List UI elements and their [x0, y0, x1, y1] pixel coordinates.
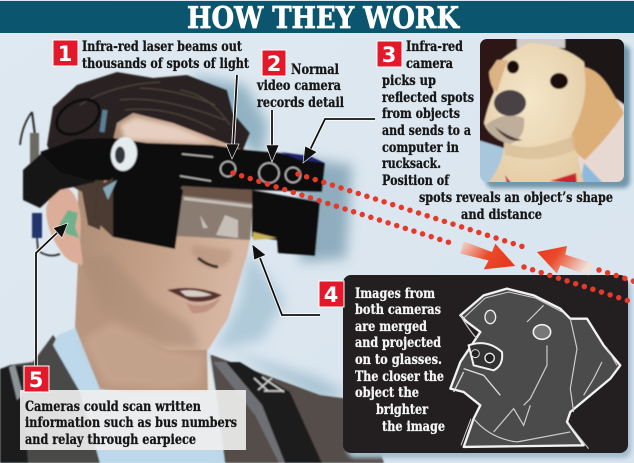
badge 4: [319, 281, 344, 307]
dog outline image: [450, 289, 620, 449]
dog eye: [533, 325, 551, 339]
badge 4: 4: [324, 283, 338, 307]
earpiece: [59, 210, 79, 238]
strap logo: [254, 377, 284, 392]
callout 2: [256, 50, 344, 111]
jacket left: [0, 335, 110, 463]
pointer arrow 3: [303, 119, 375, 163]
text: step 4: both cameras: [355, 302, 441, 318]
pointer arrow 2: [266, 110, 279, 162]
jacket right: [90, 355, 384, 463]
text: step 1: Infra-red laser beams out: [82, 39, 243, 55]
dog right ear: [572, 67, 624, 160]
right collar: [200, 353, 215, 392]
text: step 3: picks up: [382, 73, 436, 89]
text: step 2: [256, 62, 344, 111]
header banner: [0, 1, 634, 36]
backpack strap right: [213, 362, 322, 463]
text: step 3: from objects: [382, 106, 460, 122]
arrow: from left: [460, 241, 515, 269]
text: step 1: thousands of spots of light: [82, 56, 250, 72]
antenna wire: [20, 112, 32, 145]
photo: person wearing smart glasses: [0, 72, 384, 463]
text: step 4: on to glasses.: [355, 352, 442, 368]
lens: [177, 195, 253, 240]
text: step 2: Normal: [291, 62, 339, 78]
badge 3: [377, 41, 402, 67]
text: step 5: Cameras could scan written: [25, 399, 201, 415]
laser dots: lower beam, first part: [233, 173, 454, 244]
neck collar shade: [82, 320, 205, 390]
dog nose: [494, 90, 526, 116]
pointer arrow 4: [252, 244, 320, 315]
badge 5: 5: [29, 368, 43, 392]
badge 1: 1: [58, 42, 72, 66]
text: step 4: are merged: [355, 319, 427, 335]
callout 3: [377, 39, 613, 223]
callout 1: [53, 39, 250, 72]
badge 2: 2: [267, 52, 281, 76]
text: step 3: rucksack.: [382, 156, 441, 172]
neck: [75, 262, 208, 392]
hair: [47, 72, 250, 178]
text: step 3: and sends to a: [382, 123, 471, 139]
text: step 3: computer in: [382, 140, 459, 156]
right goggle block: [252, 190, 320, 256]
sensor cylinder: [30, 133, 39, 163]
forehead highlight: [120, 117, 215, 143]
dog mouth: [495, 127, 522, 141]
pointer arrow 5: [36, 223, 68, 366]
dog eyes: [507, 60, 519, 74]
text: step 3: camera: [406, 56, 453, 72]
ear: [46, 188, 83, 264]
text: step 4: Images from: [355, 286, 435, 302]
text: step 1: [82, 39, 250, 72]
laser dots: lower beam, second part: [524, 267, 634, 303]
soft blue shadows behind head: [190, 75, 352, 400]
lens highlight: [184, 197, 252, 238]
white ring: [109, 135, 139, 173]
laser dots: upper beam, second part: [599, 270, 634, 281]
mouth: [167, 288, 222, 302]
arrow: from right: [537, 246, 594, 275]
badge 1: [53, 40, 78, 66]
red arrows converging: [460, 241, 594, 275]
text: step 2: video camera: [256, 78, 341, 94]
red collar: [504, 172, 578, 182]
headband: [40, 138, 325, 192]
backpack strap left: [0, 366, 28, 463]
callout 5: [20, 366, 246, 450]
shirt: [53, 327, 225, 463]
dog left ear: [489, 60, 508, 92]
camera lenses: [220, 162, 300, 183]
text: step 4: brighter: [376, 402, 429, 418]
face: [78, 113, 253, 350]
text: step 2: records detail: [257, 95, 344, 111]
band highlights: [180, 154, 213, 181]
text: step 4: and projected: [355, 335, 441, 351]
badge 3: 3: [382, 43, 396, 67]
blue sensor top: [280, 152, 325, 163]
earpiece wire: [37, 238, 60, 256]
text: step 3: reflected spots: [382, 90, 474, 106]
skin gap: [182, 186, 253, 204]
side box: [23, 150, 95, 208]
text panel 5: [20, 390, 246, 450]
blue connector: [32, 213, 42, 238]
text: step 3: [382, 39, 613, 223]
dog chin shadow: [504, 135, 575, 159]
text: step 5: [25, 399, 237, 448]
pointer arrow 1: [226, 75, 239, 159]
text: step 3: Infra-red: [406, 39, 463, 55]
text: step 4: object the: [355, 385, 419, 401]
laser dots: upper beam, first part: [298, 174, 530, 249]
text: step 3: Position of: [382, 173, 450, 189]
goggle side panel: [95, 178, 183, 249]
text: step 4: [355, 286, 445, 435]
sideburn: [62, 166, 104, 230]
text: step 4: the image: [382, 419, 445, 435]
badge 5: [24, 366, 49, 392]
text: step 5: and relay through earpiece: [25, 432, 196, 448]
text: step 3: and distance: [461, 207, 542, 223]
text: step 5: information such as bus numbers: [25, 415, 237, 431]
dog photo: [478, 37, 630, 188]
stubble jaw shade: [82, 255, 200, 348]
dog head: [484, 43, 586, 184]
cable loop: [51, 93, 105, 141]
title: HOW THEY WORK: [187, 1, 460, 36]
nose shadow: [192, 245, 232, 268]
text: step 4: The closer the: [355, 369, 444, 385]
dog muzzle shade: [486, 115, 524, 144]
dog nose: [469, 343, 502, 370]
panel 4: dark projected image box: [343, 275, 631, 458]
